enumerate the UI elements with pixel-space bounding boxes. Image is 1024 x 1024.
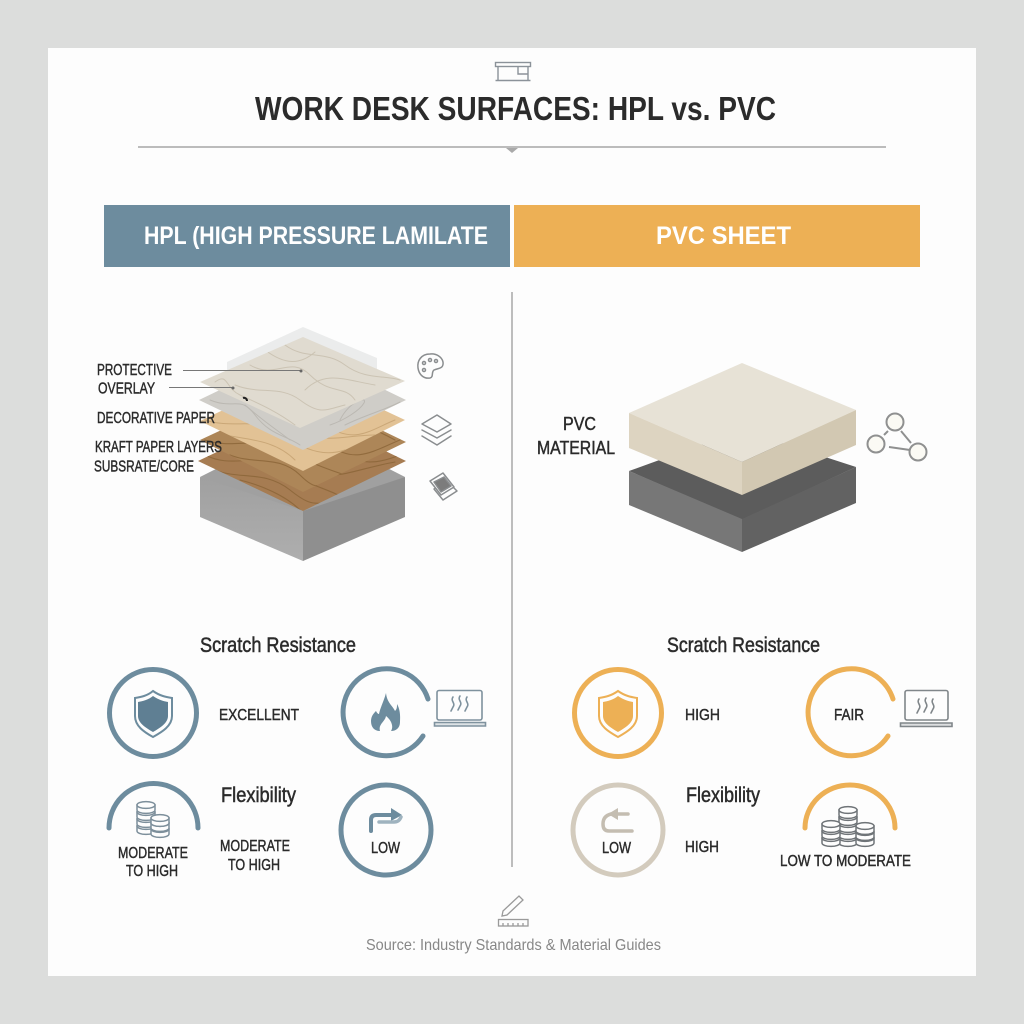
label: protective overlay: PROTECTIVE xyxy=(97,362,172,379)
value: excellent: EXCELLENT xyxy=(219,707,299,724)
icon: shield ring xyxy=(574,670,662,756)
icon: layers xyxy=(422,415,451,445)
substrate layer xyxy=(198,450,406,511)
source line: Source: Industry Standards & Material Guides xyxy=(366,937,661,954)
icon: coins arc xyxy=(805,785,895,846)
icon: palette xyxy=(418,354,443,378)
column header: PVC xyxy=(514,205,920,267)
value: moderate to high under coins: MODERATE xyxy=(118,845,188,862)
value: moderate to high: MODERATE xyxy=(220,838,290,855)
protective overlay back sheet xyxy=(227,327,377,400)
icon: flexibility ring low: LOW xyxy=(371,840,401,857)
label: decorative paper: DECORATIVE PAPER xyxy=(97,410,215,427)
icon: desk xyxy=(496,62,530,80)
dark base block xyxy=(629,430,856,552)
icon: laptop heat xyxy=(434,690,486,726)
title rule with pointer xyxy=(138,146,886,153)
heading: flexibility: Flexibility xyxy=(221,784,296,807)
value: moderate to high: TO HIGH xyxy=(228,857,280,874)
heading: scratch resistance: Scratch Resistance xyxy=(200,634,356,657)
icon: fair ring xyxy=(808,669,893,756)
icon: flexibility ring low xyxy=(573,785,663,875)
panel: HPL properties xyxy=(109,634,486,880)
tan decorative layer xyxy=(200,410,405,471)
icon: laptop heat xyxy=(900,690,952,726)
label: PVC material: PVC xyxy=(563,414,596,434)
gray layer xyxy=(199,390,406,450)
label: PVC material xyxy=(537,414,615,458)
column header: HPL xyxy=(104,205,510,267)
header xyxy=(138,62,886,153)
kraft layer xyxy=(200,430,406,492)
leader mark xyxy=(243,398,247,401)
icon: flexibility ring low xyxy=(341,785,431,875)
panel: HPL layer diagram xyxy=(94,327,457,561)
column header: HPL: HPL (HIGH PRESSURE LAMILATE xyxy=(144,222,488,250)
value: low to moderate: LOW TO MODERATE xyxy=(780,853,911,870)
value: moderate to high under coins: TO HIGH xyxy=(126,863,178,880)
icon: heat ring with flame xyxy=(343,669,428,756)
label: protective overlay: OVERLAY xyxy=(98,380,155,398)
label: substrate core: SUBSRATE/CORE xyxy=(94,458,194,476)
heading: scratch resistance: Scratch Resistance xyxy=(667,634,820,657)
label: protective overlay xyxy=(97,362,302,398)
title: WORK DESK SURFACES: HPL vs. PVC xyxy=(255,90,776,127)
heading: flexibility: Flexibility xyxy=(686,784,760,807)
cream top block xyxy=(629,363,856,495)
icon: flexibility ring low: LOW xyxy=(602,840,632,857)
icon: coins arc xyxy=(109,784,198,837)
value: moderate to high under coins xyxy=(118,845,188,880)
icon: ruler and pencil xyxy=(498,896,528,926)
value: high: HIGH xyxy=(685,839,719,856)
icon: shield ring xyxy=(110,670,196,756)
core block xyxy=(200,425,405,561)
icon: paper stack xyxy=(430,473,457,500)
panel: PVC diagram xyxy=(537,363,926,552)
column header: PVC: PVC SHEET xyxy=(656,222,791,250)
panel: PVC properties xyxy=(573,634,952,875)
value: moderate to high xyxy=(220,838,290,874)
overlay sheet xyxy=(200,337,405,428)
value: high: HIGH xyxy=(685,707,720,724)
icon: fair ring: FAIR xyxy=(834,707,864,724)
footer xyxy=(366,896,661,954)
label: kraft paper layers: KRAFT PAPER LAYERS xyxy=(95,439,222,456)
icon: molecule xyxy=(868,414,926,460)
label: PVC material: MATERIAL xyxy=(537,438,615,458)
center divider xyxy=(511,292,513,867)
